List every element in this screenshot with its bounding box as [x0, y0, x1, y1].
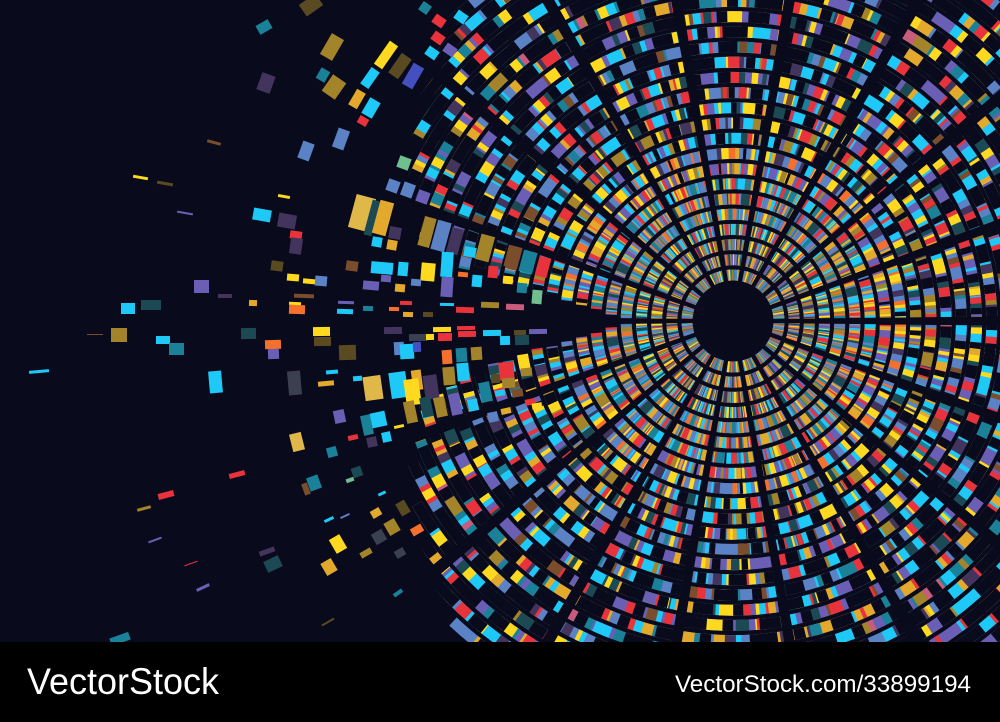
ring 9 [565, 153, 901, 489]
ring 4 [641, 229, 825, 413]
ring 23 [353, 0, 1000, 701]
ring 11 [535, 123, 931, 519]
ring 10 [550, 138, 916, 504]
ring 21 [383, 0, 1000, 671]
central hole [693, 281, 773, 361]
ring 7 [596, 184, 870, 458]
ring 19 [413, 1, 1000, 641]
ring 5 [626, 214, 840, 428]
radial genome chart [253, 0, 1000, 722]
ring 13 [505, 93, 961, 549]
ring 16 [459, 47, 1000, 595]
footer bar [0, 642, 1000, 722]
ring 6 [611, 199, 855, 443]
ring 25 [322, 0, 1000, 722]
ring 15 [474, 62, 992, 580]
image reference url: VectorStock.com/33899194 [675, 671, 971, 698]
ring 3 [657, 245, 809, 397]
ring 8 [581, 169, 885, 473]
ring 24 [337, 0, 1000, 717]
ring 1 [687, 275, 779, 367]
ring 14 [489, 77, 977, 565]
ring 12 [520, 108, 946, 534]
ring 26 [307, 0, 1000, 722]
ring 17 [444, 32, 1000, 610]
radial spokes [253, 0, 1000, 722]
scattered fragments [29, 0, 551, 646]
ring 18 [429, 17, 1000, 625]
ring 22 [368, 0, 1000, 686]
ring 2 [672, 260, 794, 382]
brand wordmark: VectorStock [27, 661, 219, 702]
ring 20 [398, 0, 1000, 656]
